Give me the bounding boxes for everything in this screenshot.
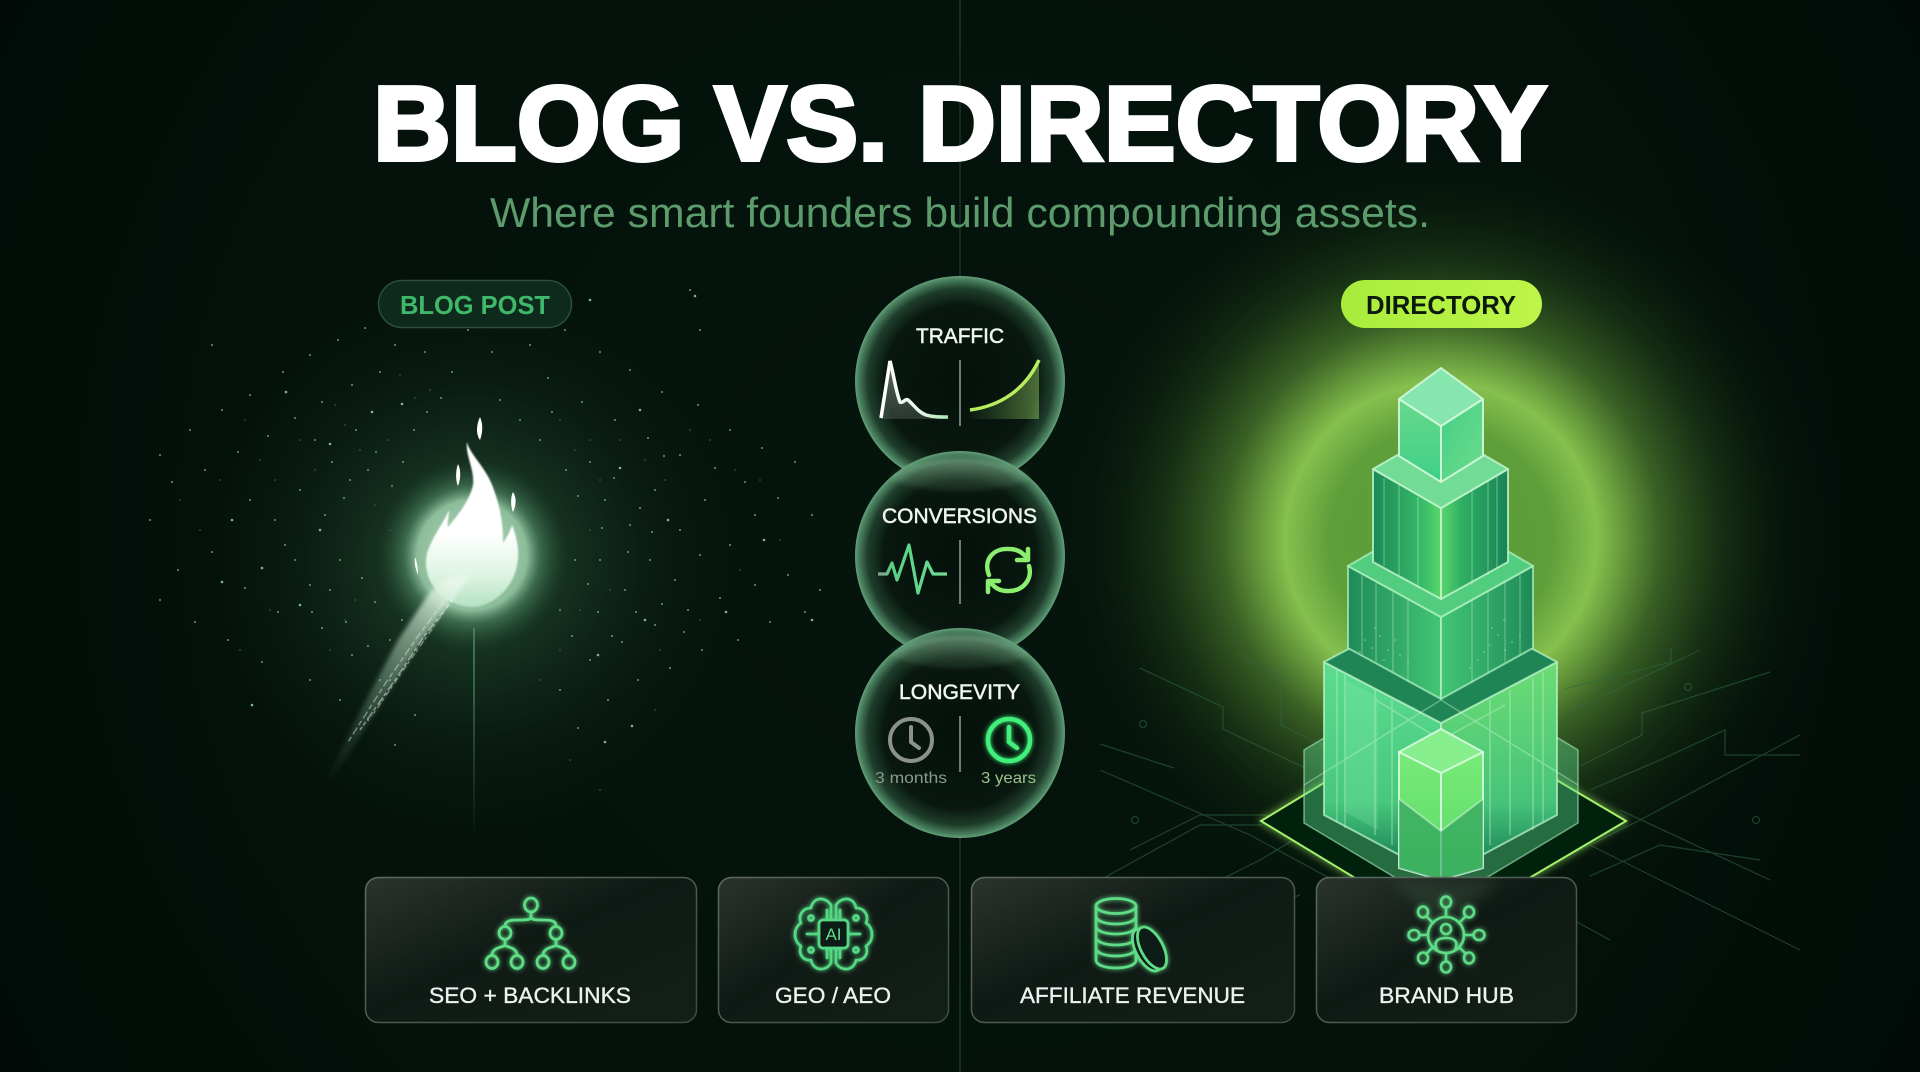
label: 3 years: 3 years <box>981 770 1036 787</box>
panel: comparison bubbles <box>855 276 1065 838</box>
card: affiliate revenue <box>972 878 1294 1022</box>
particle field <box>150 290 820 790</box>
card: GEO / AEO <box>718 878 948 1022</box>
tower <box>1304 368 1578 905</box>
tier 4 <box>1324 600 1557 877</box>
tier 1 top cube <box>1399 368 1483 482</box>
title: BLOG VS. DIRECTORY <box>373 65 1547 183</box>
chart: blog traffic spike <box>881 361 948 419</box>
tier 2 internal stripes <box>1384 476 1497 588</box>
circuit lines <box>1100 648 1800 950</box>
bubble: conversions <box>855 451 1065 661</box>
icon: clock grey <box>890 719 932 761</box>
icon: AI brain <box>795 899 872 969</box>
bubble top highlight <box>890 458 1030 492</box>
tier 2 <box>1373 430 1508 599</box>
icon: link tree <box>486 898 575 968</box>
panel: directory <box>1041 139 1841 950</box>
flame sparks <box>415 417 516 575</box>
icon: coin stack <box>1096 898 1173 975</box>
icon: clock green <box>988 719 1030 761</box>
tower dust specks <box>1360 620 1520 668</box>
tier 4 internal light stripes <box>1304 670 1578 845</box>
pill: directory <box>1341 280 1542 328</box>
card: SEO + backlinks <box>366 878 696 1022</box>
icon: refresh cycle <box>987 549 1030 592</box>
label: SEO + BACKLINKS <box>429 983 631 1008</box>
bubble: traffic <box>855 276 1065 486</box>
bubble: conversions: CONVERSIONS <box>882 505 1037 528</box>
base platform <box>1261 712 1626 930</box>
tier 4 soft highlight <box>1345 680 1378 830</box>
tier 3 internal stripes <box>1362 575 1520 682</box>
card: brand hub <box>1316 878 1576 1022</box>
card top light <box>1390 880 1500 915</box>
label: GEO / AEO <box>775 983 891 1008</box>
flame body <box>426 442 518 607</box>
front small cube <box>1399 729 1483 880</box>
bubble: longevity: LONGEVITY <box>899 681 1020 704</box>
label: AFFILIATE REVENUE <box>1020 983 1245 1008</box>
bubble top highlight <box>890 636 1030 668</box>
icon: pulse wave <box>878 545 947 593</box>
pill: blog post <box>378 280 572 328</box>
center divider line <box>959 0 961 1072</box>
icon: burning flame <box>322 417 567 792</box>
vertical stem line <box>473 628 475 838</box>
panel: blog post <box>150 280 820 838</box>
pill: directory: DIRECTORY <box>1366 290 1516 320</box>
flame burning trail <box>322 575 470 792</box>
halo glow <box>1041 139 1841 939</box>
soft glow around flame <box>202 290 742 830</box>
tier 5 translucent base <box>1304 668 1578 905</box>
bubble: traffic: TRAFFIC <box>916 325 1004 348</box>
bubble: longevity <box>855 628 1065 838</box>
label: BRAND HUB <box>1379 983 1514 1008</box>
pill: blog post: BLOG POST <box>400 290 550 320</box>
icon: brand hub network <box>1408 896 1484 972</box>
subtitle: Where smart founders build compounding assets. <box>490 189 1430 236</box>
icon text: AI: AI <box>825 925 842 944</box>
tier 3 <box>1348 512 1533 699</box>
label: 3 months: 3 months <box>875 770 947 787</box>
chart: directory traffic growth <box>970 360 1039 419</box>
